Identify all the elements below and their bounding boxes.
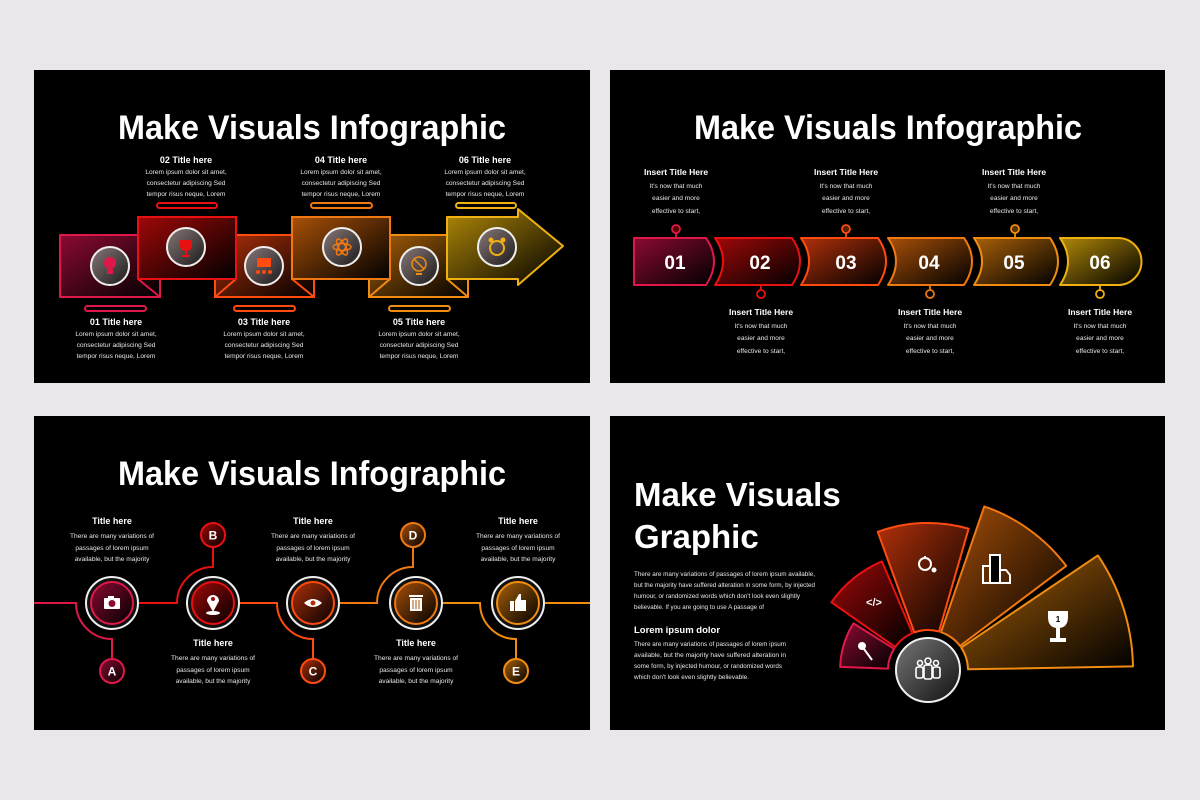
panel: bottom-right fan graphic	[610, 416, 1165, 730]
chevron 04	[888, 238, 972, 285]
title: Make Visuals Infographic	[694, 109, 1082, 147]
panel: top-right numbered chevrons	[610, 70, 1165, 383]
step box 5	[369, 235, 468, 297]
chevron 05: 05	[1003, 253, 1025, 274]
text: step 3: 03 Title here	[238, 317, 290, 327]
text: step 4: tempor risus neque, Lorem	[302, 191, 381, 198]
text: step 4: 04 Title here	[315, 155, 367, 165]
texts top: available, but the majority	[75, 556, 150, 563]
chevron 05	[974, 238, 1058, 285]
texts top: Title here	[498, 516, 538, 526]
texts top: passages of lorem ipsum	[481, 545, 555, 552]
text blocks top: It's now that much	[650, 183, 703, 190]
letter E	[504, 659, 528, 683]
chevron 02: 02	[749, 253, 771, 274]
texts bottom: There are many variations of	[171, 655, 255, 662]
texts bottom: Title here	[396, 638, 436, 648]
texts bottom: passages of lorem ipsum	[379, 667, 453, 674]
step box 1	[60, 235, 160, 297]
text blocks top: effective to start,	[822, 208, 870, 215]
paragraph 2: which don't look even slightly believable.	[633, 674, 749, 681]
texts top: available, but the majority	[481, 556, 556, 563]
text blocks bottom	[729, 307, 1132, 355]
node C: eye	[287, 577, 339, 629]
text blocks bottom: It's now that much	[735, 323, 788, 330]
text: step 1: tempor risus neque, Lorem	[77, 353, 156, 360]
title	[634, 476, 841, 555]
icon: globe	[400, 247, 438, 285]
letter E: E	[512, 664, 520, 678]
text: step 5: tempor risus neque, Lorem	[380, 353, 459, 360]
text: step 4: Lorem ipsum dolor sit amet,	[300, 169, 382, 176]
node E: thumbs up	[492, 577, 544, 629]
text: step 1	[75, 317, 157, 360]
text blocks bottom: effective to start,	[1076, 348, 1124, 355]
paragraph 2: available, but the majority have suffered alteration in	[634, 652, 786, 659]
panel: top-left step arrows	[34, 70, 590, 383]
text: step 3	[223, 317, 305, 360]
text blocks top: effective to start,	[990, 208, 1038, 215]
sector: trophy: 1	[1056, 615, 1061, 624]
title: Make Visuals Infographic	[118, 455, 506, 493]
paragraph 1: There are many variations of passages of lorem ipsum available,	[634, 571, 815, 578]
texts top: There are many variations of	[271, 533, 355, 540]
text blocks bottom: effective to start,	[906, 348, 954, 355]
texts bottom: available, but the majority	[176, 678, 251, 685]
text: step 4: consectetur adipiscing Sed	[302, 180, 381, 187]
text: step 1: Lorem ipsum dolor sit amet,	[75, 331, 157, 338]
text blocks top: easier and more	[990, 195, 1038, 202]
text blocks bottom: Insert Title Here	[729, 307, 793, 317]
text: step 2: tempor risus neque, Lorem	[147, 191, 226, 198]
chevron 03	[801, 238, 886, 285]
letter A	[100, 659, 124, 683]
texts top: Title here	[92, 516, 132, 526]
letter D	[401, 523, 425, 547]
sector: key	[840, 623, 894, 669]
chevron 04: 04	[918, 253, 940, 274]
text: step 1: 01 Title here	[90, 317, 142, 327]
text blocks bottom: It's now that much	[1074, 323, 1127, 330]
texts top: passages of lorem ipsum	[75, 545, 149, 552]
icon: network	[245, 247, 283, 285]
letter C: C	[309, 664, 318, 678]
paragraph 1: but the majority have suffered alteration in some form, by injected	[634, 582, 815, 589]
chevron 01	[634, 238, 714, 285]
letter B	[201, 523, 225, 547]
letter C	[301, 659, 325, 683]
chevron 03: 03	[835, 253, 857, 274]
title: Make Visuals Infographic	[118, 109, 506, 147]
text: step 2: consectetur adipiscing Sed	[147, 180, 226, 187]
sector: buildings	[941, 506, 1066, 646]
text: step 2	[145, 155, 227, 198]
text blocks bottom: Insert Title Here	[898, 307, 962, 317]
text blocks top: easier and more	[822, 195, 870, 202]
text: step 5: Lorem ipsum dolor sit amet,	[378, 331, 460, 338]
text: step 6: tempor risus neque, Lorem	[446, 191, 525, 198]
texts top: Title here	[293, 516, 333, 526]
texts bottom: There are many variations of	[374, 655, 458, 662]
paragraph 1	[634, 571, 815, 611]
panel: bottom-left timeline circles	[34, 416, 590, 730]
letter A: A	[108, 664, 117, 678]
texts bottom	[171, 638, 458, 685]
letter D: D	[409, 528, 418, 542]
subheading: Lorem ipsum dolor	[634, 625, 720, 636]
step box 4	[292, 217, 390, 279]
paragraph 1: believable. If you are going to use A passage of	[634, 604, 764, 611]
text: step 4	[300, 155, 382, 198]
text: step 1: consectetur adipiscing Sed	[77, 342, 156, 349]
node A: camera	[86, 577, 138, 629]
chevron 01: 01	[664, 253, 686, 274]
text: step 6	[444, 155, 526, 198]
texts bottom: Title here	[193, 638, 233, 648]
sector: code: </>	[866, 597, 882, 609]
chevron 06: 06	[1089, 253, 1111, 274]
text: step 5: consectetur adipiscing Sed	[380, 342, 459, 349]
title: Make Visuals	[634, 476, 841, 513]
text blocks bottom: easier and more	[737, 335, 785, 342]
text blocks top: Insert Title Here	[982, 167, 1046, 177]
step arrow 6	[447, 209, 563, 285]
icon: alarm clock	[478, 228, 516, 266]
text blocks top: effective to start,	[652, 208, 700, 215]
sector: timer gear	[878, 523, 969, 632]
texts top: There are many variations of	[476, 533, 560, 540]
sector: code	[831, 561, 912, 647]
text blocks bottom: effective to start,	[737, 348, 785, 355]
paragraph 2	[633, 641, 786, 681]
texts top: There are many variations of	[70, 533, 154, 540]
text blocks top: Insert Title Here	[814, 167, 878, 177]
title: Graphic	[634, 518, 759, 555]
center circle: team	[896, 638, 960, 702]
chevron 02	[715, 238, 800, 285]
text: step 3: tempor risus neque, Lorem	[225, 353, 304, 360]
text blocks top: It's now that much	[820, 183, 873, 190]
text: step 5	[378, 317, 460, 360]
pins	[672, 225, 1104, 298]
text blocks bottom: It's now that much	[904, 323, 957, 330]
sector: trophy	[961, 555, 1133, 669]
texts top	[70, 516, 560, 563]
node D: trash	[390, 577, 442, 629]
text: step 2: 02 Title here	[160, 155, 212, 165]
pills	[85, 203, 516, 311]
paragraph 1: humour, or randomized words which don't look even slightly	[634, 593, 801, 600]
texts top: passages of lorem ipsum	[276, 545, 350, 552]
text: step 6: consectetur adipiscing Sed	[446, 180, 525, 187]
texts top: available, but the majority	[276, 556, 351, 563]
node B: location pin	[187, 577, 239, 629]
texts bottom: available, but the majority	[379, 678, 454, 685]
connectors	[34, 547, 590, 659]
text blocks bottom: easier and more	[1076, 335, 1124, 342]
text blocks top: Insert Title Here	[644, 167, 708, 177]
text: step 5: 05 Title here	[393, 317, 445, 327]
text: step 6: 06 Title here	[459, 155, 511, 165]
text blocks top	[644, 167, 1046, 215]
text blocks bottom: Insert Title Here	[1068, 307, 1132, 317]
step box 2	[138, 217, 236, 279]
text blocks bottom: easier and more	[906, 335, 954, 342]
texts bottom: passages of lorem ipsum	[176, 667, 250, 674]
text blocks top: easier and more	[652, 195, 700, 202]
icon: atom	[323, 228, 361, 266]
text blocks top: It's now that much	[988, 183, 1041, 190]
icon: bulb	[91, 247, 129, 285]
paragraph 2: There are many variations of passages of lorem ipsum	[634, 641, 786, 648]
step box 3	[215, 235, 314, 297]
text: step 3: consectetur adipiscing Sed	[225, 342, 304, 349]
chevron 06	[1060, 238, 1142, 285]
text: step 2: Lorem ipsum dolor sit amet,	[145, 169, 227, 176]
text: step 6: Lorem ipsum dolor sit amet,	[444, 169, 526, 176]
letter B: B	[209, 528, 218, 542]
paragraph 2: some form, by injected humour, or randomized words	[634, 663, 783, 670]
text: step 3: Lorem ipsum dolor sit amet,	[223, 331, 305, 338]
icon: trophy	[167, 228, 205, 266]
